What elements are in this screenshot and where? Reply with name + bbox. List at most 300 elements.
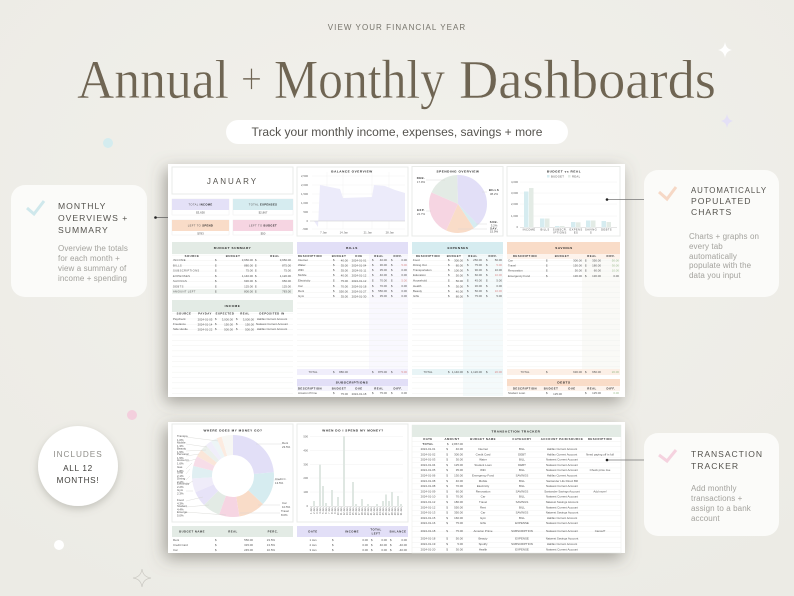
table: daily balance: $ <box>390 543 392 547</box>
chart: when do I spend my money: 18 Jan <box>360 507 364 515</box>
table: subscriptions: Amazon Prime <box>298 391 317 395</box>
table: transaction tracker: 2024-01-06 <box>421 474 436 478</box>
chart: balance overview: 7 Jan <box>320 230 327 234</box>
table: daily balance: $ <box>371 538 373 542</box>
table: bills: $ <box>372 284 374 288</box>
table: budget name breakdown: Rent <box>173 538 179 542</box>
callout: monthly overviews: Overview the totals <box>58 244 128 253</box>
table: daily balance: $ <box>332 538 334 542</box>
table: budget summary: 630.00 <box>244 279 253 283</box>
table: bills: $ <box>372 278 374 282</box>
table: transaction tracker: Natwest Current Account <box>546 495 578 499</box>
callout: transaction tracker: TRANSACTION <box>691 449 763 459</box>
table: bills: TOTAL <box>308 370 318 374</box>
table: transaction tracker: Car <box>481 495 485 499</box>
table: daily balance: $ <box>332 543 334 547</box>
callout: monthly overviews: SUMMARY <box>58 225 109 235</box>
table: bills: 40.00 <box>380 258 387 262</box>
table: transaction tracker: Natwest Savings Account <box>546 511 579 515</box>
table: daily balance: $ <box>371 543 373 547</box>
table: transaction tracker: 160.00 <box>454 516 463 520</box>
chart: balance overview: 1,500 <box>301 192 308 196</box>
table: bills: 0.00 <box>401 284 407 288</box>
chart: when do I spend my money: 7 Jan <box>327 507 331 514</box>
table: income: 2024-01-14 <box>198 322 213 326</box>
table: transaction tracker: 40.00 <box>456 479 463 483</box>
table: bills: 2024-01-30 <box>352 294 367 298</box>
table: transaction tracker: Halifax Current Account <box>547 452 577 456</box>
table: bills: 0.00 <box>401 294 407 298</box>
summary tile: left to spend <box>172 220 229 235</box>
table: income: Halifax Current Account <box>257 317 287 321</box>
summary tile: total income: TOTAL INCOME <box>188 202 213 206</box>
table: transaction tracker: Santander Savings Account <box>544 489 580 493</box>
chart: when do I spend my money: 25 Jan <box>381 507 385 515</box>
title: Dashboards <box>459 49 716 110</box>
table: budget name breakdown: Car <box>173 548 178 552</box>
table: budget summary: SAVINGS <box>173 279 187 283</box>
table: transaction tracker: Halifax Current Account <box>547 474 577 478</box>
table: savings: 630.00 <box>573 370 582 374</box>
chart: budget vs real <box>507 166 620 236</box>
chart: budget vs real: EXPENS <box>569 228 583 232</box>
table: bills: 70.00 <box>380 284 387 288</box>
chart: where does my money go donut: Personal <box>177 452 189 456</box>
summary tile: total income: $3,650 <box>196 211 205 215</box>
callout: monthly overviews: view a summary of <box>58 264 127 273</box>
table: expenses: 5.00 <box>496 263 502 267</box>
panel: annual dashboard sheet <box>172 424 621 553</box>
chart: where does my money go donut: Electricity <box>177 482 190 486</box>
table: transaction tracker: $ <box>446 479 448 483</box>
summary tile: left to spend: $783 <box>197 231 204 235</box>
chart: spending overview: DEB. <box>417 176 425 180</box>
table: budget summary: 75.00 <box>284 269 291 273</box>
table: transaction tracker: 30.00 <box>456 458 463 462</box>
chart: when do I spend my money: 500 <box>303 434 308 438</box>
table: budget summary: $ <box>255 263 257 267</box>
table: bills: 35.00 <box>341 268 348 272</box>
table: bills: 2024-01-04 <box>352 264 367 268</box>
table: transaction tracker: $ <box>446 542 448 546</box>
table: transaction tracker: BILL <box>519 484 525 488</box>
table: expenses: 1,140.00 <box>452 370 463 374</box>
chart: balance overview: 21 Jan <box>364 230 372 234</box>
table: daily balance: 3 Jan <box>309 548 317 552</box>
table: expenses: Dining Out <box>413 263 427 267</box>
table: budget summary: $ <box>255 274 257 278</box>
callout: transaction tracker: Add monthly <box>691 484 737 493</box>
table: budget summary: $ <box>215 258 217 262</box>
chart: where does my money go donut: Dining <box>177 476 186 480</box>
table: bills: 2024-01-01 <box>352 258 367 262</box>
chart: budget vs real: REAL <box>572 174 581 178</box>
table: transaction tracker: 2024-01-13 <box>421 511 436 515</box>
table: transaction tracker: Gym <box>480 516 487 520</box>
table: bills: $ <box>391 263 393 267</box>
chart: balance overview: BALANCE OVERVIEW <box>331 170 373 174</box>
chart: where does my money go donut: Home Im. <box>177 458 190 462</box>
chart: when do I spend my money: 0 <box>306 504 308 508</box>
table: budget name breakdown: 550.00 <box>244 538 253 542</box>
callout: automatically populated charts: data you input <box>689 271 741 280</box>
table: budget summary: 783.00 <box>282 290 291 294</box>
chart: spending overview: SUB. <box>490 220 498 224</box>
chart: budget vs real: 4,000 <box>511 180 518 184</box>
summary tile: left to spend: LEFT TO SPEND <box>188 224 213 228</box>
chart: when do I spend my money: 300 <box>303 462 308 466</box>
table: transaction tracker: Cancel? <box>595 529 606 533</box>
chart: when do I spend my money: 19 Jan <box>363 507 367 515</box>
chart: when do I spend my money: 200 <box>303 476 308 480</box>
table: budget summary: 1,120.00 <box>280 274 291 278</box>
table: expenses: 10.00 <box>495 289 502 293</box>
table: daily balance: DATE <box>308 530 318 534</box>
chart: when do I spend my money: 15 Jan <box>351 507 355 515</box>
table: transaction tracker: $ <box>446 536 448 540</box>
table: debts: 0.00 <box>613 391 619 395</box>
table: transaction tracker: $ <box>446 458 448 462</box>
badge: includes all 12 months: INCLUDES <box>53 450 103 459</box>
chart: where does my money go donut: Gym <box>177 488 184 492</box>
chart: when do I spend my money: 14 Jan <box>348 507 352 515</box>
table: budget name breakdown: PERC. <box>268 530 278 534</box>
table: debts <box>507 379 620 396</box>
table: bills: 2024-01-18 <box>352 284 367 288</box>
chart: spending overview: BILLS <box>489 188 499 192</box>
table: savings: Car <box>508 258 513 262</box>
table: income: Halifax Current Account <box>257 327 287 331</box>
table: expenses <box>412 242 503 396</box>
table: bills: $ <box>333 258 335 262</box>
callout: automatically populated charts: CHARTS <box>691 207 732 217</box>
chart: where does my money go donut: 1.3% <box>177 444 184 448</box>
table: savings: $ <box>585 274 587 278</box>
chart: when do I spend my money: 8 Jan <box>330 507 334 514</box>
table: daily balance: 0.00 <box>362 543 368 547</box>
chart: when do I spend my money: 29 Jan <box>393 507 397 515</box>
chart: where does my money go donut: 13.5% <box>275 481 284 485</box>
table: transaction tracker: 2024-01-01 <box>421 447 436 451</box>
title: + <box>241 53 262 104</box>
chart: when do I spend my money: 13 Jan <box>345 507 349 515</box>
chart: where does my money go donut: 1.6% <box>177 462 184 466</box>
table: daily balance: 0.00 <box>381 538 387 542</box>
table: savings: 60.00 <box>594 268 601 272</box>
connector arrow: tracker <box>606 459 644 461</box>
table: savings: 300.00 <box>573 258 582 262</box>
table: bills: 2024-01-27 <box>352 290 367 294</box>
table: expenses: $ <box>486 370 488 374</box>
chart: where does my money go donut: 10.5% <box>282 505 291 509</box>
table: transaction tracker: 2024-01-08 <box>421 479 436 483</box>
table: bills: $ <box>391 294 393 298</box>
chart: where does my money go donut: 5.0% <box>177 514 184 518</box>
table: transaction tracker: Check price rise <box>590 468 611 472</box>
table: subscriptions: DUE <box>355 386 363 390</box>
table: transaction tracker: Amazon Prime <box>474 529 493 533</box>
table: transaction tracker: 2024-01-18 <box>421 529 436 533</box>
table: transaction tracker: 2024-01-04 <box>421 463 436 467</box>
table: income: $ <box>236 327 238 331</box>
table: budget name breakdown: $ <box>215 538 217 542</box>
table: transaction tracker: Natwest Current Account <box>546 505 578 509</box>
table: expenses: $ <box>486 273 488 277</box>
badge: includes all 12 months: MONTHS! <box>57 476 99 485</box>
table: bills: $ <box>333 273 335 277</box>
table: transaction tracker: $ <box>446 489 448 493</box>
chart: budget vs real: SAVING <box>585 228 597 232</box>
table: transaction tracker: 2024-01-05 <box>421 468 436 472</box>
callout: transaction tracker <box>644 433 779 536</box>
table: budget summary: $ <box>215 290 217 294</box>
chart: where does my money go donut: 23.5% <box>282 445 291 449</box>
chart: when do I spend my money: 5 Jan <box>321 507 325 514</box>
table: daily balance: -40.00 <box>399 543 407 547</box>
chart: when do I spend my money: 16 Jan <box>354 507 358 515</box>
table: expenses: 75.00 <box>475 294 482 298</box>
chart: when do I spend my money: 3 Jan <box>315 507 319 514</box>
table: transaction tracker: Natwest Current Account <box>546 484 578 488</box>
table: income: 500.00 <box>224 328 233 332</box>
table: transaction tracker: Renovation <box>476 489 491 493</box>
chart: when do I spend my money: 23 Jan <box>375 507 379 515</box>
table: income: EXPECTED <box>216 312 234 316</box>
table: debts: DUE <box>568 386 576 390</box>
table: daily balance: 40.00 <box>380 543 387 547</box>
table: subscriptions: BUDGET <box>332 386 346 390</box>
table: bills: Internet <box>298 258 308 262</box>
table: transaction tracker: 2024-01-08 <box>421 484 436 488</box>
chart: where does my money go donut: 8.0% <box>281 513 288 517</box>
chart: where does my money go donut: Gas <box>177 465 183 469</box>
table: expenses: $ <box>448 289 450 293</box>
table: debts: Student Loan <box>508 391 526 395</box>
table: expenses: TOTAL <box>423 370 433 374</box>
table: bills: $ <box>372 294 374 298</box>
table: transaction tracker: 2024-01-12 <box>421 500 436 504</box>
table: budget summary: 650.00 <box>282 279 291 283</box>
table: subscriptions: DIFF. <box>394 386 402 390</box>
table: bills: 875.00 <box>378 370 387 374</box>
table: budget summary: SUBSCRIPTIONS <box>173 269 200 273</box>
table: expenses: $ <box>448 370 450 374</box>
table: expenses: 30.00 <box>475 284 482 288</box>
table: bills: Rent <box>298 289 304 293</box>
chart: spending overview: 24.7% <box>417 212 426 216</box>
table: expenses: BUDGET <box>447 254 461 258</box>
table: daily balance: LEFT <box>372 532 380 536</box>
table: savings: Renovation <box>508 268 523 272</box>
table: budget summary: $ <box>215 284 217 288</box>
table: expenses: $ <box>467 273 469 277</box>
table: savings: $ <box>585 258 587 262</box>
panel: monthly dashboard sheet <box>172 166 620 396</box>
table: debts: DIFF. <box>607 386 615 390</box>
table: bills: 5.00 <box>401 370 407 374</box>
table: transaction tracker: Health <box>479 548 488 552</box>
table: expenses: 0.00 <box>496 284 502 288</box>
table: budget summary: BUDGET SUMMARY <box>214 246 252 250</box>
table: expenses: 30.00 <box>456 284 463 288</box>
table: budget summary: 880.00 <box>244 263 253 267</box>
table: transaction tracker: Emergency Fund <box>472 474 494 478</box>
table: savings: 150.00 <box>573 264 582 268</box>
table: transaction tracker: 75.00 <box>456 529 463 533</box>
table: income: 150.00 <box>224 322 233 326</box>
table: expenses: 20.00 <box>495 370 502 374</box>
table: transaction tracker: 75.00 <box>456 521 463 525</box>
table: bills: $ <box>372 289 374 293</box>
table: subscriptions: SUBSCRIPTIONS <box>336 380 368 384</box>
table: expenses: 5.00 <box>496 278 502 282</box>
table: income: DEPOSITED IN <box>259 312 285 316</box>
icon: orange check <box>659 187 676 199</box>
chart: where does my money go donut: Transpo. <box>177 434 188 438</box>
chart: spending overview: 17.9% <box>417 180 426 184</box>
callout: monthly overviews <box>11 185 147 297</box>
table: bills: 0.00 <box>401 258 407 262</box>
table: savings: DIFF. <box>607 254 615 258</box>
table: transaction tracker: DEBT <box>518 452 526 456</box>
table: transaction tracker: SAVINGS <box>516 511 528 515</box>
table: expenses: $ <box>448 278 450 282</box>
table: expenses: 250.00 <box>473 258 482 262</box>
table: expenses: $ <box>486 268 488 272</box>
table: budget name breakdown: 23.5% <box>267 538 275 542</box>
chart: budget vs real: S <box>590 230 592 234</box>
table: budget summary: INCOME <box>173 258 186 262</box>
chart: budget vs real: 3,000 <box>511 191 518 195</box>
table: bills: $ <box>391 370 393 374</box>
table: bills: $ <box>391 258 393 262</box>
table: budget summary: 75.00 <box>246 269 253 273</box>
table: bills: Gym <box>298 294 305 298</box>
summary tile: total income <box>172 199 229 215</box>
table: savings: Travel <box>508 264 516 268</box>
table: expenses: EXPENSES <box>447 246 469 250</box>
table: budget name breakdown: 10.5% <box>267 548 275 552</box>
table: income <box>172 300 293 396</box>
table: transaction tracker: BILL <box>519 468 525 472</box>
table: bills: $ <box>391 284 393 288</box>
table: transaction tracker: Need paying off in full <box>586 452 614 456</box>
chart: when do I spend my money: WHEN DO I SPEND MY MONEY? <box>322 428 384 432</box>
table: savings: $ <box>585 264 587 268</box>
table: transaction tracker: TRANSACTION TRACKER <box>492 430 541 434</box>
table: transaction tracker: EXPENSE <box>515 536 529 540</box>
table: income: $ <box>236 322 238 326</box>
table: transaction tracker: BILL <box>519 447 525 451</box>
table: bills: $ <box>333 294 335 298</box>
table: expenses: 5.00 <box>496 294 502 298</box>
table: daily balance: $ <box>390 548 392 552</box>
table: daily balance: 0.00 <box>362 538 368 542</box>
table: transaction tracker: Halifax Current Account <box>547 447 577 451</box>
table: bills: DUE <box>355 254 363 258</box>
table: daily balance: $ <box>390 538 392 542</box>
table: bills: 75.00 <box>341 279 348 283</box>
table: budget summary: 875.00 <box>282 263 291 267</box>
table: bills: 5.00 <box>401 278 407 282</box>
table: transaction tracker: DEBT <box>518 463 526 467</box>
callout: monthly overviews: income + spending <box>58 274 127 283</box>
table: savings: $ <box>546 264 548 268</box>
callout: monthly overviews: MONTHLY <box>58 201 106 211</box>
table: debts: REAL <box>587 386 597 390</box>
table: transaction tracker: Internet <box>478 447 488 451</box>
table: budget summary: 800.00 <box>244 290 253 294</box>
chart: budget vs real: IPTIONS <box>553 230 567 234</box>
table: expenses: 40.00 <box>456 290 463 294</box>
table: expenses: $ <box>467 263 469 267</box>
chart: where does my money go donut: Emerge. <box>177 510 188 514</box>
icon: blue check <box>27 201 44 214</box>
table: budget summary: 1,140.00 <box>242 274 253 278</box>
chart: balance overview: -500 <box>302 227 308 231</box>
table: transaction tracker: 550.00 <box>454 505 463 509</box>
table: bills: $ <box>333 284 335 288</box>
chart: budget vs real: BILLS <box>540 228 550 232</box>
table: income: 3,000.00 <box>222 318 233 322</box>
table: transaction tracker: $ <box>446 447 448 451</box>
table: savings: 50.00 <box>612 258 619 262</box>
table: expenses: 50.00 <box>456 274 463 278</box>
chart: where does my money go donut: Mobile <box>177 440 186 444</box>
table: savings: 0.00 <box>613 274 619 278</box>
chart: budget vs real: 2,000 <box>511 202 518 206</box>
table: expenses: $ <box>486 294 488 298</box>
table: expenses: $ <box>467 284 469 288</box>
table: bills: 0.00 <box>401 289 407 293</box>
table: expenses: DESCRIPTION <box>416 254 440 258</box>
chart: spending overview: SAV. <box>490 226 498 230</box>
chart: where does my money go donut: Car <box>282 501 287 505</box>
table: budget summary: BUDGET <box>226 254 240 258</box>
table: subscriptions: 75.00 <box>380 391 387 395</box>
table: transaction tracker: Add more! <box>593 489 607 493</box>
table: transaction tracker: 2024-01-03 <box>421 458 436 462</box>
chart: where does my money go donut: 4.4% <box>177 508 184 512</box>
table: expenses: 60.00 <box>475 273 482 277</box>
table: transaction tracker: Mobile <box>479 479 488 483</box>
table: bills: 30.00 <box>380 263 387 267</box>
table: savings: 130.00 <box>573 274 582 278</box>
table: transaction tracker: BILL <box>519 479 525 483</box>
table: subscriptions: 2024-01-18 <box>352 392 367 396</box>
table: expenses: Education <box>413 273 426 277</box>
table: expenses: $ <box>448 268 450 272</box>
chart: where does my money go donut: 1.0% <box>177 438 184 442</box>
table: subscriptions: DESCRIPTION <box>298 386 322 390</box>
table: subscriptions <box>297 379 408 396</box>
table: bills: 35.00 <box>341 264 348 268</box>
table: transaction tracker: Natwest Current Account <box>546 521 578 525</box>
table: savings: 180.00 <box>592 264 601 268</box>
chart: when do I spend my money: 1 Jan <box>309 507 313 514</box>
table: daily balance: $ <box>371 548 373 552</box>
chart: where does my money go donut: Gifts <box>177 470 183 474</box>
table: expenses: $ <box>486 278 488 282</box>
table: transaction tracker: Natwest Current Account <box>546 468 578 472</box>
table: transaction tracker: 70.00 <box>456 495 463 499</box>
table: expenses: $ <box>448 294 450 298</box>
table: transaction tracker: 2024-01-15 <box>421 516 436 520</box>
table: transaction tracker: Gifts <box>480 521 487 525</box>
chart: where does my money go donut: Beauty <box>177 446 187 450</box>
table: transaction tracker: 30.00 <box>456 548 463 552</box>
decorative star: lavender <box>721 114 733 128</box>
